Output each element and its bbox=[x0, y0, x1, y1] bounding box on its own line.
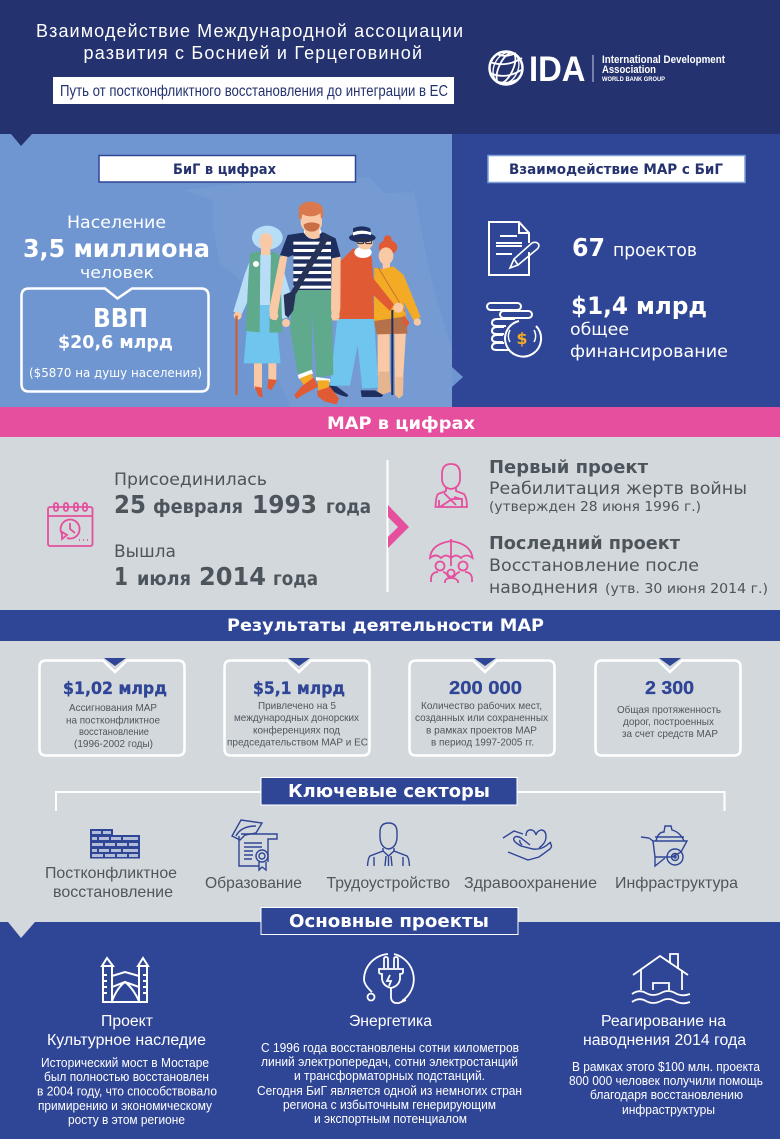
icon: wheelbarrow bbox=[641, 826, 687, 866]
section banner: IDA in numbers: МАР в цифрах bbox=[327, 414, 475, 434]
section banner: IDA in numbers bbox=[0, 407, 780, 437]
sector: employment: Трудоустройство bbox=[326, 875, 450, 892]
title bbox=[36, 21, 463, 63]
stat: total financing bbox=[570, 292, 728, 362]
sector: healthcare bbox=[464, 830, 597, 892]
panel: right IDA engagement with BiH bbox=[452, 134, 780, 407]
stat: total financing: общее bbox=[570, 320, 629, 340]
text block: last project bbox=[489, 533, 768, 598]
project: energy: и экспортным потенциалом bbox=[314, 1112, 467, 1126]
project: energy bbox=[257, 954, 522, 1126]
text block: first project bbox=[489, 457, 747, 515]
text block: joined and left dates: июля bbox=[137, 568, 191, 590]
panel: header bbox=[0, 0, 780, 146]
sector: post-conflict reconstruction: Постконфликтное bbox=[45, 865, 177, 882]
card: roads: 2 300 bbox=[645, 678, 694, 698]
arrow: panel pointer bbox=[452, 367, 463, 387]
icon: diploma and cap bbox=[232, 820, 277, 870]
card: jobs: 200 000 bbox=[449, 678, 522, 698]
sector: healthcare: Здравоохранение bbox=[464, 875, 597, 892]
project: energy: и трансформаторных подстанций. bbox=[294, 1069, 485, 1083]
card: roads bbox=[596, 658, 740, 756]
project: cultural heritage bbox=[37, 958, 217, 1127]
text block: joined and left dates bbox=[114, 470, 371, 591]
stat: projects: проектов bbox=[613, 240, 697, 261]
project: cultural heritage: Проект bbox=[101, 1013, 153, 1030]
population stat bbox=[23, 213, 210, 282]
icon: injured person bbox=[436, 464, 467, 507]
population stat: 3,5 миллиона bbox=[23, 234, 210, 263]
stat: projects bbox=[572, 233, 697, 262]
text block: joined and left dates: 1 bbox=[114, 562, 128, 591]
stat: total financing: финансирование bbox=[570, 342, 728, 362]
project: flood response: наводнения 2014 года bbox=[583, 1032, 746, 1049]
card: donor funds: Привлечено на 5 bbox=[258, 700, 336, 712]
heading box: key sectors: Ключевые секторы bbox=[288, 781, 490, 802]
figure: old man bbox=[329, 226, 403, 397]
logo: IDA bbox=[488, 48, 725, 89]
text block: joined and left dates: года bbox=[326, 496, 371, 518]
card: roads: Общая протяженность bbox=[617, 704, 721, 716]
panel: main projects bbox=[0, 908, 780, 1139]
callout: GDP bbox=[22, 288, 208, 392]
project: cultural heritage: примирению и экономическому bbox=[38, 1099, 213, 1113]
section banner: IDA results: Результаты деятельности МАР bbox=[227, 616, 544, 636]
sector: infrastructure: Инфраструктура bbox=[615, 875, 738, 892]
text block: joined and left dates: 25 bbox=[114, 490, 146, 519]
title: Взаимодействие Международной ассоциации bbox=[36, 21, 463, 41]
card: allocations: восстановление bbox=[79, 726, 149, 738]
card: jobs: в период 1997-2005 гг. bbox=[431, 736, 534, 748]
project: flood response bbox=[569, 954, 763, 1117]
text block: first project: Первый проект bbox=[489, 457, 649, 478]
stat: total financing: $1,4 млрд bbox=[571, 292, 707, 320]
project: cultural heritage: росту в этом регионе bbox=[68, 1113, 185, 1127]
project: energy: Сегодня БиГ является одной из немногих стран bbox=[257, 1084, 522, 1098]
card: allocations: на постконфликтное bbox=[66, 714, 160, 726]
logo: IDA: IDA bbox=[529, 50, 586, 89]
project: flood response: 800 000 человек получили помощь bbox=[569, 1074, 763, 1088]
icon: flooded house bbox=[632, 954, 690, 1003]
icon: document with pen bbox=[489, 222, 539, 275]
text block: first project: (утвержден 28 июня 1996 г.) bbox=[489, 499, 701, 515]
card: donor funds: $5,1 млрд bbox=[253, 679, 345, 699]
stat: projects: 67 bbox=[572, 233, 605, 262]
sector: post-conflict reconstruction: восстановление bbox=[53, 884, 173, 901]
icon: calendar bbox=[48, 503, 92, 546]
heading box: key sectors bbox=[261, 778, 517, 805]
card: donor funds: конференциях под bbox=[253, 724, 340, 736]
project: energy: С 1996 года восстановлены сотни километров bbox=[261, 1041, 519, 1055]
project: energy: линий электропередач, сотни электростанций bbox=[261, 1055, 518, 1069]
card: allocations: (1996-2002 годы) bbox=[74, 738, 153, 750]
icon: coins bbox=[487, 303, 541, 357]
arrow: chevron bbox=[388, 505, 409, 548]
sector: infrastructure bbox=[615, 826, 738, 892]
panel: left BiH in numbers bbox=[0, 134, 452, 407]
sector: education: Образование bbox=[205, 875, 302, 892]
project: cultural heritage: Культурное наследие bbox=[47, 1032, 206, 1049]
project: cultural heritage: Исторический мост в Мостаре bbox=[41, 1056, 209, 1070]
card: jobs: в рамках проектов МАР bbox=[426, 724, 537, 736]
callout: GDP: $20,6 млрд bbox=[58, 332, 173, 353]
card: jobs: созданных или сохраненных bbox=[415, 712, 549, 724]
figure: bearded man with bag bbox=[269, 202, 341, 404]
heading box: BiH in numbers: БиГ в цифрах bbox=[173, 162, 276, 178]
heading box: IDA engagement: Взаимодействие МАР с БиГ bbox=[509, 162, 723, 178]
text block: joined and left dates: февраля bbox=[153, 496, 243, 518]
project: energy: региона с избыточным генерирующим bbox=[283, 1098, 496, 1112]
subtitle box bbox=[53, 77, 454, 104]
heading box: IDA engagement bbox=[488, 156, 745, 182]
figure: old lady bbox=[233, 226, 290, 397]
sector: education bbox=[205, 820, 302, 892]
project: cultural heritage: был полностью восстановлен bbox=[44, 1070, 209, 1084]
card: jobs bbox=[410, 658, 554, 756]
heading box: main projects bbox=[261, 908, 518, 934]
text block: first project: Реабилитация жертв войны bbox=[489, 479, 747, 499]
title: развития с Боснией и Герцеговиной bbox=[84, 43, 422, 63]
card: allocations: Ассигнования МАР bbox=[69, 702, 157, 714]
illustration: group of people bbox=[233, 202, 421, 404]
card: allocations bbox=[40, 658, 184, 756]
sector: post-conflict reconstruction bbox=[45, 829, 177, 901]
project: flood response: В рамках этого $100 млн. проекта bbox=[572, 1060, 760, 1074]
icon: globe bbox=[488, 48, 524, 88]
text block: joined and left dates: года bbox=[273, 568, 318, 590]
card: jobs: Количество рабочих мест, bbox=[421, 700, 542, 712]
text block: joined and left dates: Присоединилась bbox=[114, 470, 267, 490]
population stat: Население bbox=[67, 213, 166, 233]
icon: coins: $ bbox=[516, 329, 528, 348]
callout: GDP: ($5870 на душу населения) bbox=[29, 366, 202, 380]
card: donor funds bbox=[224, 658, 370, 756]
card: donor funds: председательством МАР и ЕС bbox=[227, 736, 368, 748]
card: roads: за счет средств МАР bbox=[622, 728, 718, 740]
text block: joined and left dates: 1993 bbox=[252, 490, 317, 519]
logo: IDA: Association bbox=[602, 64, 656, 76]
sector: employment bbox=[326, 823, 450, 892]
logo: IDA: WORLD BANK GROUP bbox=[602, 76, 666, 83]
project: flood response: инфраструктуры bbox=[622, 1103, 715, 1117]
section banner: IDA results bbox=[0, 610, 780, 641]
project: flood response: благодаря восстановлению bbox=[590, 1088, 743, 1102]
heading box: main projects: Основные проекты bbox=[289, 911, 489, 932]
figure: girl bbox=[374, 235, 421, 398]
callout: GDP: ВВП bbox=[93, 304, 148, 334]
text block: joined and left dates: Вышла bbox=[114, 542, 176, 562]
heading box: BiH in numbers bbox=[99, 156, 356, 182]
project: cultural heritage: в 2004 году, что способствовало bbox=[37, 1084, 217, 1098]
text block: last project: Восстановление после bbox=[489, 556, 699, 576]
card: donor funds: международных донорских bbox=[234, 712, 360, 724]
population stat: человек bbox=[80, 263, 154, 282]
project: energy: Энергетика bbox=[349, 1013, 432, 1030]
icon: plug bbox=[364, 954, 414, 1003]
icon: person in suit bbox=[368, 823, 410, 866]
icon: Mostar bridge bbox=[102, 958, 148, 1002]
icon: brick wall bbox=[90, 829, 140, 858]
panel: IDA dates and projects bbox=[0, 437, 780, 610]
card: allocations: $1,02 млрд bbox=[63, 679, 167, 699]
logo: IDA: International Development bbox=[602, 54, 725, 66]
icon: hand holding heart bbox=[503, 830, 552, 860]
subtitle box: Путь от постконфликтного восстановления до интеграции в ЕС bbox=[60, 83, 448, 100]
text block: joined and left dates: 2014 bbox=[199, 562, 266, 591]
text block: last project: наводнения bbox=[489, 578, 598, 598]
project: flood response: Реагирование на bbox=[601, 1013, 726, 1030]
card: roads: дорог, построенных bbox=[623, 716, 715, 728]
text block: last project: (утв. 30 июня 2014 г.) bbox=[605, 581, 768, 597]
icon: umbrella over family bbox=[430, 539, 472, 583]
text block: last project: Последний проект bbox=[489, 533, 681, 554]
